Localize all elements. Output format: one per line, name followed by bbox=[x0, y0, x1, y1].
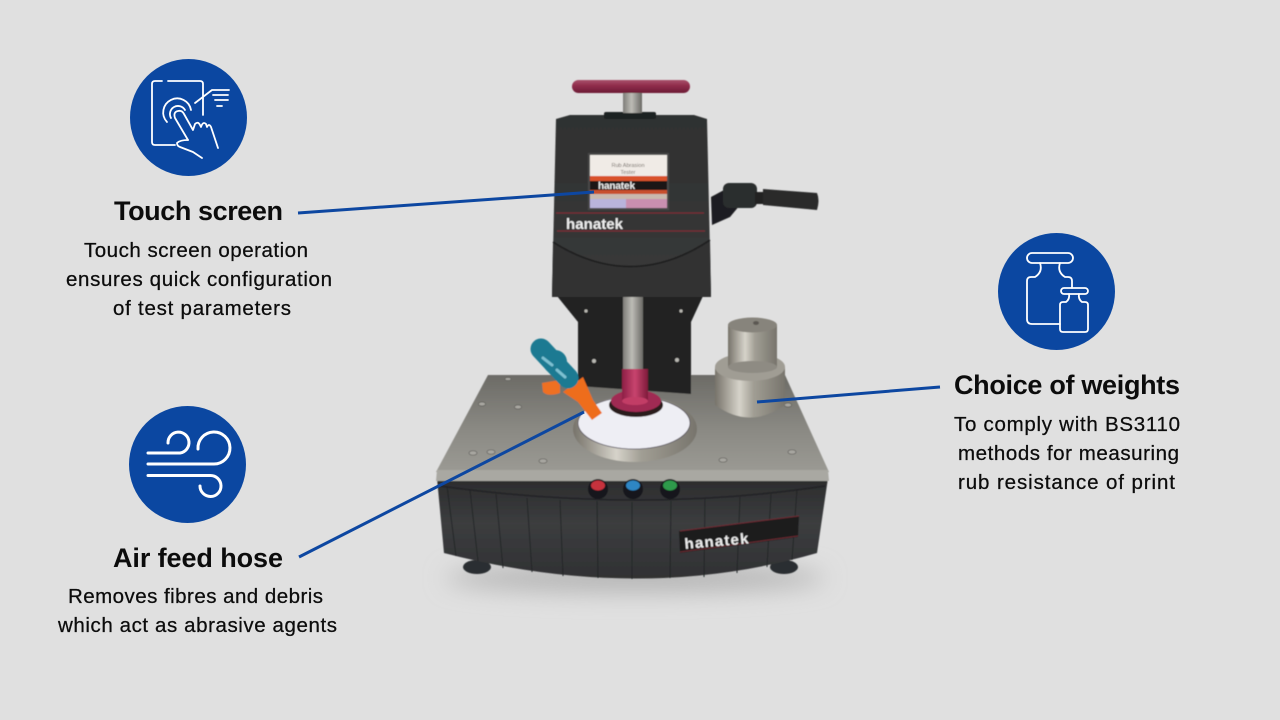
heading: touch screen: Touch screen bbox=[114, 196, 283, 226]
text: touch screen description: of test parameters bbox=[113, 297, 291, 320]
machine base front bbox=[437, 478, 828, 578]
base logo text: hanatek bbox=[684, 530, 750, 553]
leader line: air feed hose bbox=[299, 412, 584, 557]
icon: air flow bbox=[129, 406, 246, 523]
top wheel bbox=[572, 80, 690, 119]
leader line: choice of weights bbox=[757, 387, 940, 402]
touch screen display: Tester bbox=[621, 170, 636, 176]
housing screws bbox=[584, 309, 683, 363]
red foot bbox=[609, 393, 663, 417]
disc rim bbox=[573, 396, 697, 462]
leader line: touch screen bbox=[298, 192, 594, 213]
text: touch screen description: ensures quick configuration bbox=[66, 268, 332, 291]
column shaft bbox=[623, 296, 643, 372]
heading: choice of weights: Choice of weights bbox=[954, 370, 1180, 400]
head label stripes bbox=[556, 213, 705, 231]
air hose bbox=[541, 349, 602, 420]
text: touch screen description bbox=[66, 239, 332, 320]
touch screen display: Rub Abrasion bbox=[611, 163, 645, 169]
touch screen display bbox=[588, 153, 669, 210]
text: choice of weights description bbox=[954, 413, 1180, 494]
steel plate bbox=[436, 375, 829, 472]
text: air feed hose description: Removes fibres and debris bbox=[68, 585, 323, 608]
product photo: rub abrasion tester bbox=[436, 80, 829, 579]
plate front edge bbox=[436, 470, 829, 481]
logo plate bbox=[679, 516, 799, 553]
text: air feed hose description bbox=[57, 585, 337, 637]
buttons bbox=[588, 479, 680, 499]
base front ribs bbox=[440, 486, 825, 579]
head logo: hanatek bbox=[566, 216, 624, 233]
text: choice of weights description: rub resistance of print bbox=[958, 471, 1175, 494]
icon: touch screen bbox=[130, 59, 247, 176]
text: air feed hose description: which act as abrasive agents bbox=[57, 614, 337, 637]
touch screen display: hanatek bbox=[598, 181, 635, 192]
head housing bbox=[552, 115, 711, 296]
text: choice of weights description: To comply with BS3110 bbox=[954, 413, 1180, 436]
heading: air feed hose: Air feed hose bbox=[113, 543, 283, 573]
text: touch screen description: Touch screen operation bbox=[84, 239, 308, 262]
icon: weights bbox=[998, 233, 1115, 350]
machine feet bbox=[463, 560, 798, 574]
paper disc bbox=[578, 397, 690, 449]
plate screws bbox=[469, 378, 796, 463]
machine shadow bbox=[445, 564, 825, 592]
side handle bbox=[711, 183, 818, 225]
column housing bbox=[557, 296, 703, 394]
head lower panel bbox=[552, 240, 711, 297]
text: choice of weights description: methods for measuring bbox=[958, 442, 1179, 465]
weights bbox=[715, 318, 785, 418]
